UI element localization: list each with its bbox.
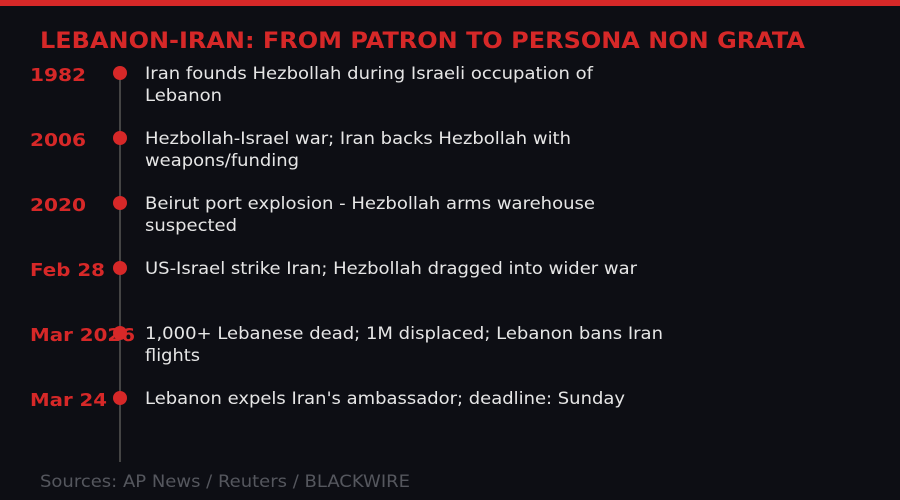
- event: Mar 2026: [30, 324, 663, 366]
- event: 1982: Lebanon: [145, 86, 222, 106]
- event: 2006: 2006: [30, 130, 86, 151]
- event: Mar 2026: Mar 2026: [30, 325, 135, 346]
- event: 1982: Iran founds Hezbollah during Israeli occupation of: [145, 64, 594, 84]
- event: Feb 28: Feb 28: [30, 260, 105, 281]
- event: 2020: 2020: [30, 195, 86, 216]
- event: Mar 24: Mar 24: [30, 390, 107, 411]
- top accent bar: [0, 0, 900, 6]
- event: Mar 24: Lebanon expels Iran's ambassador; deadline: Sunday: [145, 389, 625, 409]
- timeline axis: [119, 70, 121, 462]
- event: 1982: 1982: [30, 65, 86, 86]
- event: Mar 2026: flights: [145, 346, 200, 366]
- event: 2020: Beirut port explosion - Hezbollah arms warehouse: [145, 194, 595, 214]
- event: 2006: [30, 129, 571, 171]
- title: LEBANON-IRAN: FROM PATRON TO PERSONA NON GRATA: [40, 29, 805, 54]
- event: Feb 28: [30, 259, 637, 281]
- event: 1982: [30, 64, 594, 106]
- event: 2020: suspected: [145, 216, 237, 236]
- sources: Sources: AP News / Reuters / BLACKWIRE: [40, 472, 410, 492]
- event: Mar 24: [30, 389, 625, 411]
- event: 2006: Hezbollah-Israel war; Iran backs Hezbollah with: [145, 129, 571, 149]
- event: 2020: [30, 194, 595, 236]
- event: Feb 28: US-Israel strike Iran; Hezbollah dragged into wider war: [145, 259, 637, 279]
- event: 2006: weapons/funding: [145, 151, 299, 171]
- event: Mar 2026: 1,000+ Lebanese dead; 1M displaced; Lebanon bans Iran: [145, 324, 663, 344]
